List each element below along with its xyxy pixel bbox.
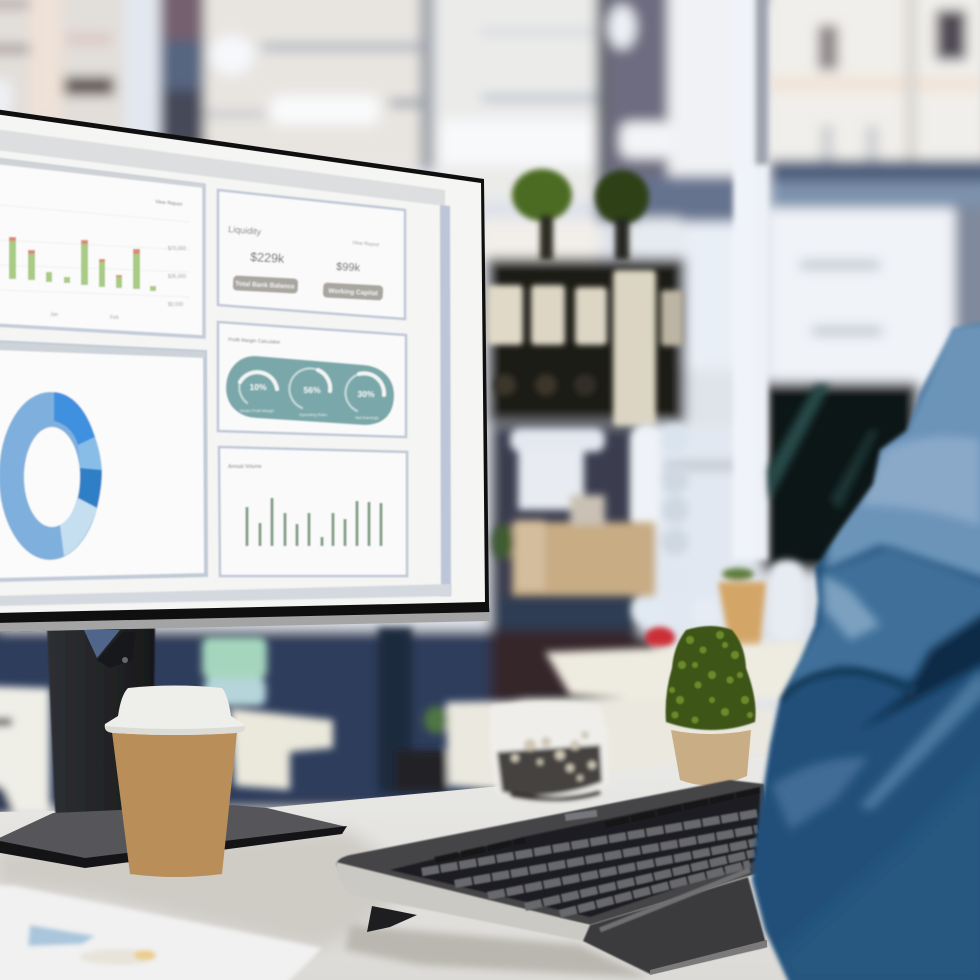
blurred terracotta pot <box>718 568 766 648</box>
pill: working capital: Working Capital <box>328 288 378 297</box>
mid sleeve <box>788 549 980 688</box>
paper on desk <box>0 885 322 980</box>
axis labels: $70,000 <box>168 246 186 252</box>
blurred white objects and dotted divider <box>510 425 804 642</box>
monitor stand base <box>0 805 347 868</box>
monitor <box>0 109 490 632</box>
shelf objects <box>487 270 683 426</box>
lower highlight <box>860 670 980 810</box>
blurred cardboard box <box>492 495 655 596</box>
panel: profit margin calculator: 10% <box>249 382 267 392</box>
cup body <box>112 732 237 877</box>
black screen <box>762 382 918 572</box>
dark gap <box>596 0 668 180</box>
panel: profit margin calculator: 30% <box>357 389 375 399</box>
desk surface <box>0 755 800 980</box>
bar chart: annual <box>247 498 381 546</box>
white column <box>733 0 768 560</box>
heading: Liquidity <box>228 224 262 237</box>
teal gauge pill <box>226 356 394 425</box>
red object <box>645 627 675 649</box>
keyboard silver edge <box>336 862 590 941</box>
axis labels: $35,000 <box>168 274 186 280</box>
blurred desks behind <box>0 628 800 815</box>
value: bank balance: $229k <box>250 250 285 266</box>
report link: View Report <box>352 240 380 248</box>
panel: annual volume <box>219 447 407 576</box>
heading: Annual Volume <box>228 464 262 470</box>
sleeve base <box>740 320 980 980</box>
small potted plant <box>666 626 756 785</box>
blurred potted plants on shelf <box>512 169 649 260</box>
panel: profit margin calculator: 56% <box>303 385 321 395</box>
pill: total bank balance: Total Bank Balance <box>235 280 295 291</box>
gauge 3 <box>346 373 384 411</box>
screen frame bands <box>0 129 445 206</box>
panel: profit margin calculator: Net Earnings <box>355 415 379 420</box>
panel: donut chart <box>0 342 206 580</box>
keyboard stand foot <box>367 906 417 932</box>
monitor bezel <box>0 109 490 632</box>
glass jar <box>490 702 608 799</box>
building right <box>668 0 748 175</box>
navy wall below <box>0 630 520 810</box>
axis labels <box>50 246 186 321</box>
axis labels: Jan <box>50 312 58 318</box>
cup lid <box>105 686 244 735</box>
bar chart: green bars <box>9 238 156 291</box>
dark fold <box>868 610 980 726</box>
pot <box>671 730 751 785</box>
monitor stand <box>47 628 155 830</box>
building left <box>0 0 160 150</box>
gauge 2 <box>289 368 330 408</box>
lower sleeve shade <box>792 793 980 974</box>
panel: revenue bars <box>0 158 204 337</box>
donut ring <box>0 392 101 560</box>
gauge 1 <box>239 372 277 403</box>
sleeve highlights <box>860 437 980 525</box>
key rows <box>390 787 760 930</box>
dark shelf <box>487 258 685 423</box>
panel: profit margin calculator <box>218 322 406 437</box>
report link: View Report <box>155 199 183 208</box>
keyboard front wedge <box>583 877 767 974</box>
upper sleeve light fabric <box>825 320 980 580</box>
foliage <box>666 626 756 730</box>
keyboard <box>336 780 768 978</box>
keyboard deck <box>336 780 768 925</box>
blurred green window <box>202 637 267 706</box>
building centre <box>204 0 422 170</box>
panel: profit margin calculator: Operating Ratio <box>299 412 328 417</box>
axis labels: $0,000 <box>168 302 184 308</box>
value: working capital: $99k <box>336 261 361 274</box>
heading: Profit Margin Calculator <box>228 337 281 346</box>
coffee cup <box>105 686 245 877</box>
dark pillar <box>160 0 204 40</box>
screen <box>0 114 485 613</box>
axis labels: Feb <box>110 315 119 321</box>
pill: working capital <box>323 282 383 301</box>
pill: total bank balance <box>233 275 298 294</box>
panel: profit margin calculator: Gross Profit Margin <box>240 408 274 413</box>
desk shaded area near monitor <box>0 830 420 950</box>
bar chart: red tips <box>9 237 140 277</box>
donut hole <box>24 427 80 527</box>
stand hinge cutout <box>84 630 120 658</box>
panel: liquidity <box>218 190 405 319</box>
person's arm in blue shirt <box>740 320 980 980</box>
keyboard shadow <box>345 925 650 978</box>
teal streak on black screen <box>768 385 878 510</box>
